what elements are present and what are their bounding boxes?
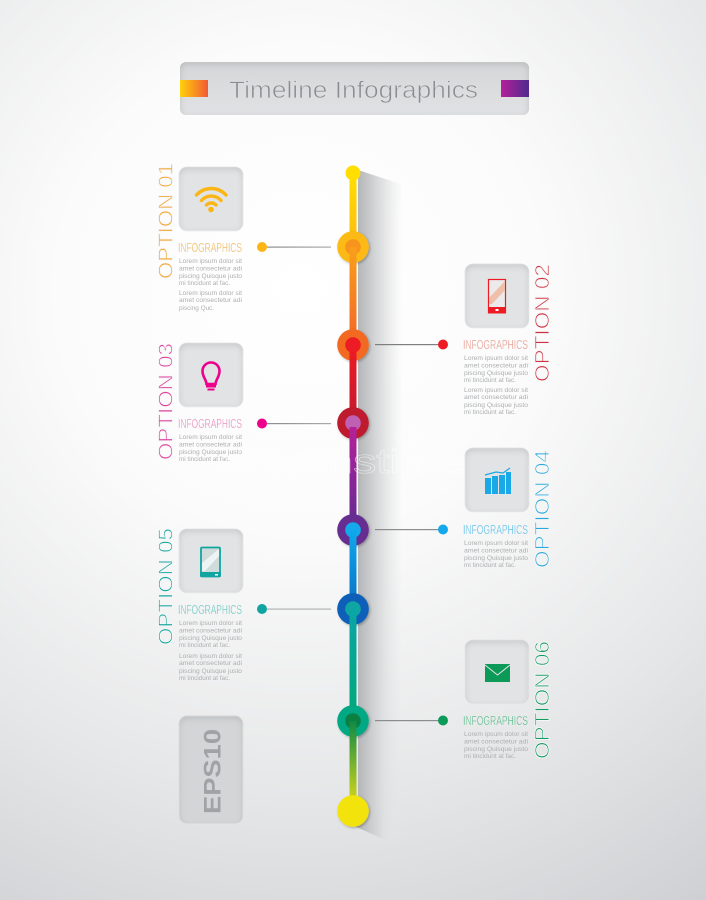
option 06 [375,640,554,760]
body text 6: Lorem ipsum dolor sit [464,732,528,738]
body text 6 [464,732,529,760]
card with lightbulb icon [179,343,243,407]
body text 4 [464,541,529,569]
body text 2: amet consectetur adi [464,395,528,401]
connector 4 [375,524,448,534]
node 3 [337,407,369,439]
title bar [180,62,529,115]
heading 4: INFOGRAPHICS [463,522,528,537]
body text 6: mi tincidunt at fac. [464,754,516,760]
body text 3: Lorem ipsum dolor sit [179,435,242,441]
node 4 [337,514,369,546]
body text 2: piscing Quisque justo [464,403,529,409]
body text 4: piscing Quisque justo [464,556,529,562]
heading 6: INFOGRAPHICS [463,713,528,728]
body text 5: mi tincidunt at fac. [179,643,230,649]
node 5 [337,593,369,625]
watermark [220,425,465,481]
option 06 label: OPTION 06 [531,641,554,759]
connector 6 [375,716,448,726]
body text 3: amet consectetur adi [179,442,242,448]
body text 6: amet consectetur adi [464,740,528,746]
connector 2 [375,340,448,350]
body text 1: Lorem ipsum dolor sit [179,291,242,297]
heading 5: INFOGRAPHICS [178,602,242,617]
body text 5: piscing Quisque justo [179,636,243,642]
node 2 [337,329,369,361]
body text 5: Lorem ipsum dolor sit [179,621,242,627]
body text 6: piscing Quisque justo [464,747,529,753]
timeline drop shadow [352,170,401,847]
option 05 label: OPTION 05 [154,528,178,645]
body text 2 [464,356,529,416]
card with envelope icon [465,640,529,704]
heading 1: INFOGRAPHICS [178,240,242,255]
body text 3 [179,435,243,463]
body text 1: piscing Quisque justo [179,274,243,280]
card with bar chart icon [465,448,529,512]
body text 2: Lorem ipsum dolor sit [464,388,528,394]
card with phone icon [465,264,529,328]
EPS10 label: EPS10 [200,729,226,814]
option 03 [154,343,331,463]
start dot [346,166,360,180]
body text 1: piscing Quc. [179,306,214,312]
body text 5: mi tincidunt at fac. [179,676,230,682]
body text 4: mi tincidunt at fac. [464,563,516,569]
title: Timeline Infographics [229,77,478,104]
connector 3 [257,418,331,428]
body text 2: Lorem ipsum dolor sit [464,356,528,362]
option 02 [375,264,554,416]
body text 5: amet consectetur adi [179,661,242,667]
option 02 label: OPTION 02 [531,264,554,382]
option 04 label: OPTION 04 [531,450,554,568]
option 05 [154,528,331,682]
option 04 [375,448,554,569]
card with tablet icon [179,529,243,593]
watermark: dreamstime [220,443,465,481]
body text 1: amet consectetur adi [179,266,242,272]
card with wifi icon [179,167,243,231]
body text 2: amet consectetur adi [464,364,528,370]
body text 3: mi tincidunt at fac. [179,457,230,463]
body text 5: amet consectetur adi [179,628,242,634]
body text 1: Lorem ipsum dolor sit [179,259,242,265]
heading 3: INFOGRAPHICS [178,416,242,431]
body text 1: mi tincidunt at fac. [179,281,230,287]
node 1 [337,231,369,263]
body text 2: mi tincidunt at fac. [464,410,516,416]
body text 5 [179,621,243,682]
heading 2: INFOGRAPHICS [463,337,528,352]
end node [337,795,369,827]
option 03 label: OPTION 03 [154,343,178,460]
EPS10 badge [179,716,243,824]
body text 5: piscing Quisque justo [179,669,243,675]
body text 4: Lorem ipsum dolor sit [464,541,528,547]
node 6 [337,705,369,737]
timeline [337,166,369,827]
connector 1 [257,242,331,252]
body text 1 [179,259,243,312]
option 01 [154,163,331,312]
body text 2: piscing Quisque justo [464,371,529,377]
body text 3: piscing Quisque justo [179,450,243,456]
body text 5: Lorem ipsum dolor sit [179,654,242,660]
body text 4: amet consectetur adi [464,548,528,554]
body text 2: mi tincidunt at fac. [464,378,516,384]
body text 1: amet consectetur adi [179,298,242,304]
connector 5 [257,604,331,614]
option 01 label: OPTION 01 [154,163,178,279]
